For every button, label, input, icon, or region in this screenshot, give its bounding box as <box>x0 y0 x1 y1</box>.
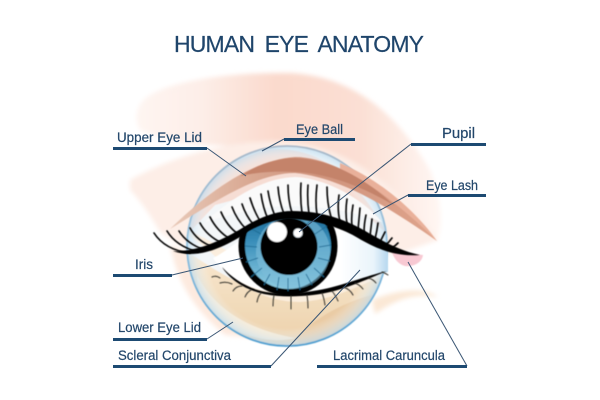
eyeball sphere <box>187 146 387 346</box>
label: eye ball <box>284 122 355 141</box>
leader: eye ball <box>262 139 284 151</box>
label: lacrimal caruncula <box>317 348 467 368</box>
under-eye skin <box>188 150 384 346</box>
leader: scleral conjunctiva <box>271 270 360 366</box>
glass reflection ring <box>187 146 387 346</box>
eye lashes upper <box>154 183 398 253</box>
upper eye lid line <box>173 211 420 255</box>
label: lower eye lid <box>113 320 207 341</box>
illustration: skin around the eye <box>130 73 441 340</box>
eyeball rim <box>187 146 387 346</box>
label: pupil <box>411 126 486 146</box>
label: upper eye lid <box>113 130 207 150</box>
label: pupil: Pupil <box>442 126 475 142</box>
label: iris: Iris <box>135 256 153 272</box>
label: scleral conjunctiva: Scleral Conjunctiva <box>118 348 231 363</box>
label: iris <box>113 256 172 277</box>
title: HUMAN EYE ANATOMY <box>174 31 424 57</box>
label: upper eye lid: Upper Eye Lid <box>117 130 202 145</box>
label: scleral conjunctiva <box>113 348 271 368</box>
leader: upper eye lid <box>207 148 246 176</box>
leader: lacrimal caruncula <box>408 262 467 366</box>
upper eye crease <box>170 157 437 241</box>
leader: lower eye lid <box>207 322 233 339</box>
leader: eye lash <box>373 195 408 214</box>
label: eye lash <box>408 178 486 197</box>
label: eye lash: Eye Lash <box>426 178 478 193</box>
label: eye ball: Eye Ball <box>296 122 343 137</box>
leader: pupil <box>299 144 411 232</box>
iris <box>238 218 338 296</box>
illustration: eyeball <box>180 146 392 352</box>
highlight large <box>267 222 287 242</box>
label: lacrimal caruncula: Lacrimal Caruncula <box>333 348 445 363</box>
lower eye lid line <box>222 267 387 296</box>
label: lower eye lid: Lower Eye Lid <box>118 320 201 335</box>
eye lashes lower <box>212 272 388 309</box>
pupil <box>260 218 318 275</box>
highlight small <box>294 228 302 238</box>
leader: iris <box>172 258 243 275</box>
lacrimal caruncula <box>391 247 423 266</box>
eye white <box>213 214 388 294</box>
